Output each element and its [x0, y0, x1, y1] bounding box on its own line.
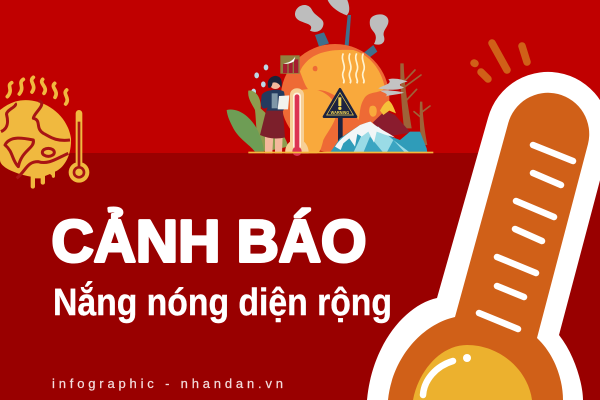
illustration: climate change globe scene [227, 0, 433, 156]
icy mountains [330, 122, 427, 153]
title: CẢNH BÁO [52, 208, 366, 274]
smoke and chimneys [295, 0, 388, 58]
icon: melting earth with thermometer [0, 77, 89, 189]
footer source: infographic - nhandan.vn [52, 376, 283, 391]
bare trees [400, 63, 430, 145]
woman holding paper [260, 76, 289, 153]
small thermometer [285, 88, 309, 156]
icon: large thermometer [367, 72, 600, 400]
chart icon [280, 55, 300, 74]
steam lines [7, 77, 67, 104]
subtitle: Nắng nóng diện rộng [53, 280, 392, 324]
water drops [251, 64, 268, 95]
tick marks [479, 145, 573, 329]
panel: lower dark red band [0, 153, 600, 400]
volcano [373, 79, 411, 137]
warning sign: WARNING [331, 110, 350, 115]
globe [281, 44, 389, 153]
ground line [248, 152, 433, 153]
leaves [227, 91, 288, 152]
bulb [413, 345, 532, 400]
thermometer [69, 110, 89, 183]
continents [1, 101, 70, 178]
earth [0, 100, 71, 189]
sparks [474, 43, 527, 79]
heat waves [342, 53, 364, 83]
warning sign [324, 89, 356, 142]
